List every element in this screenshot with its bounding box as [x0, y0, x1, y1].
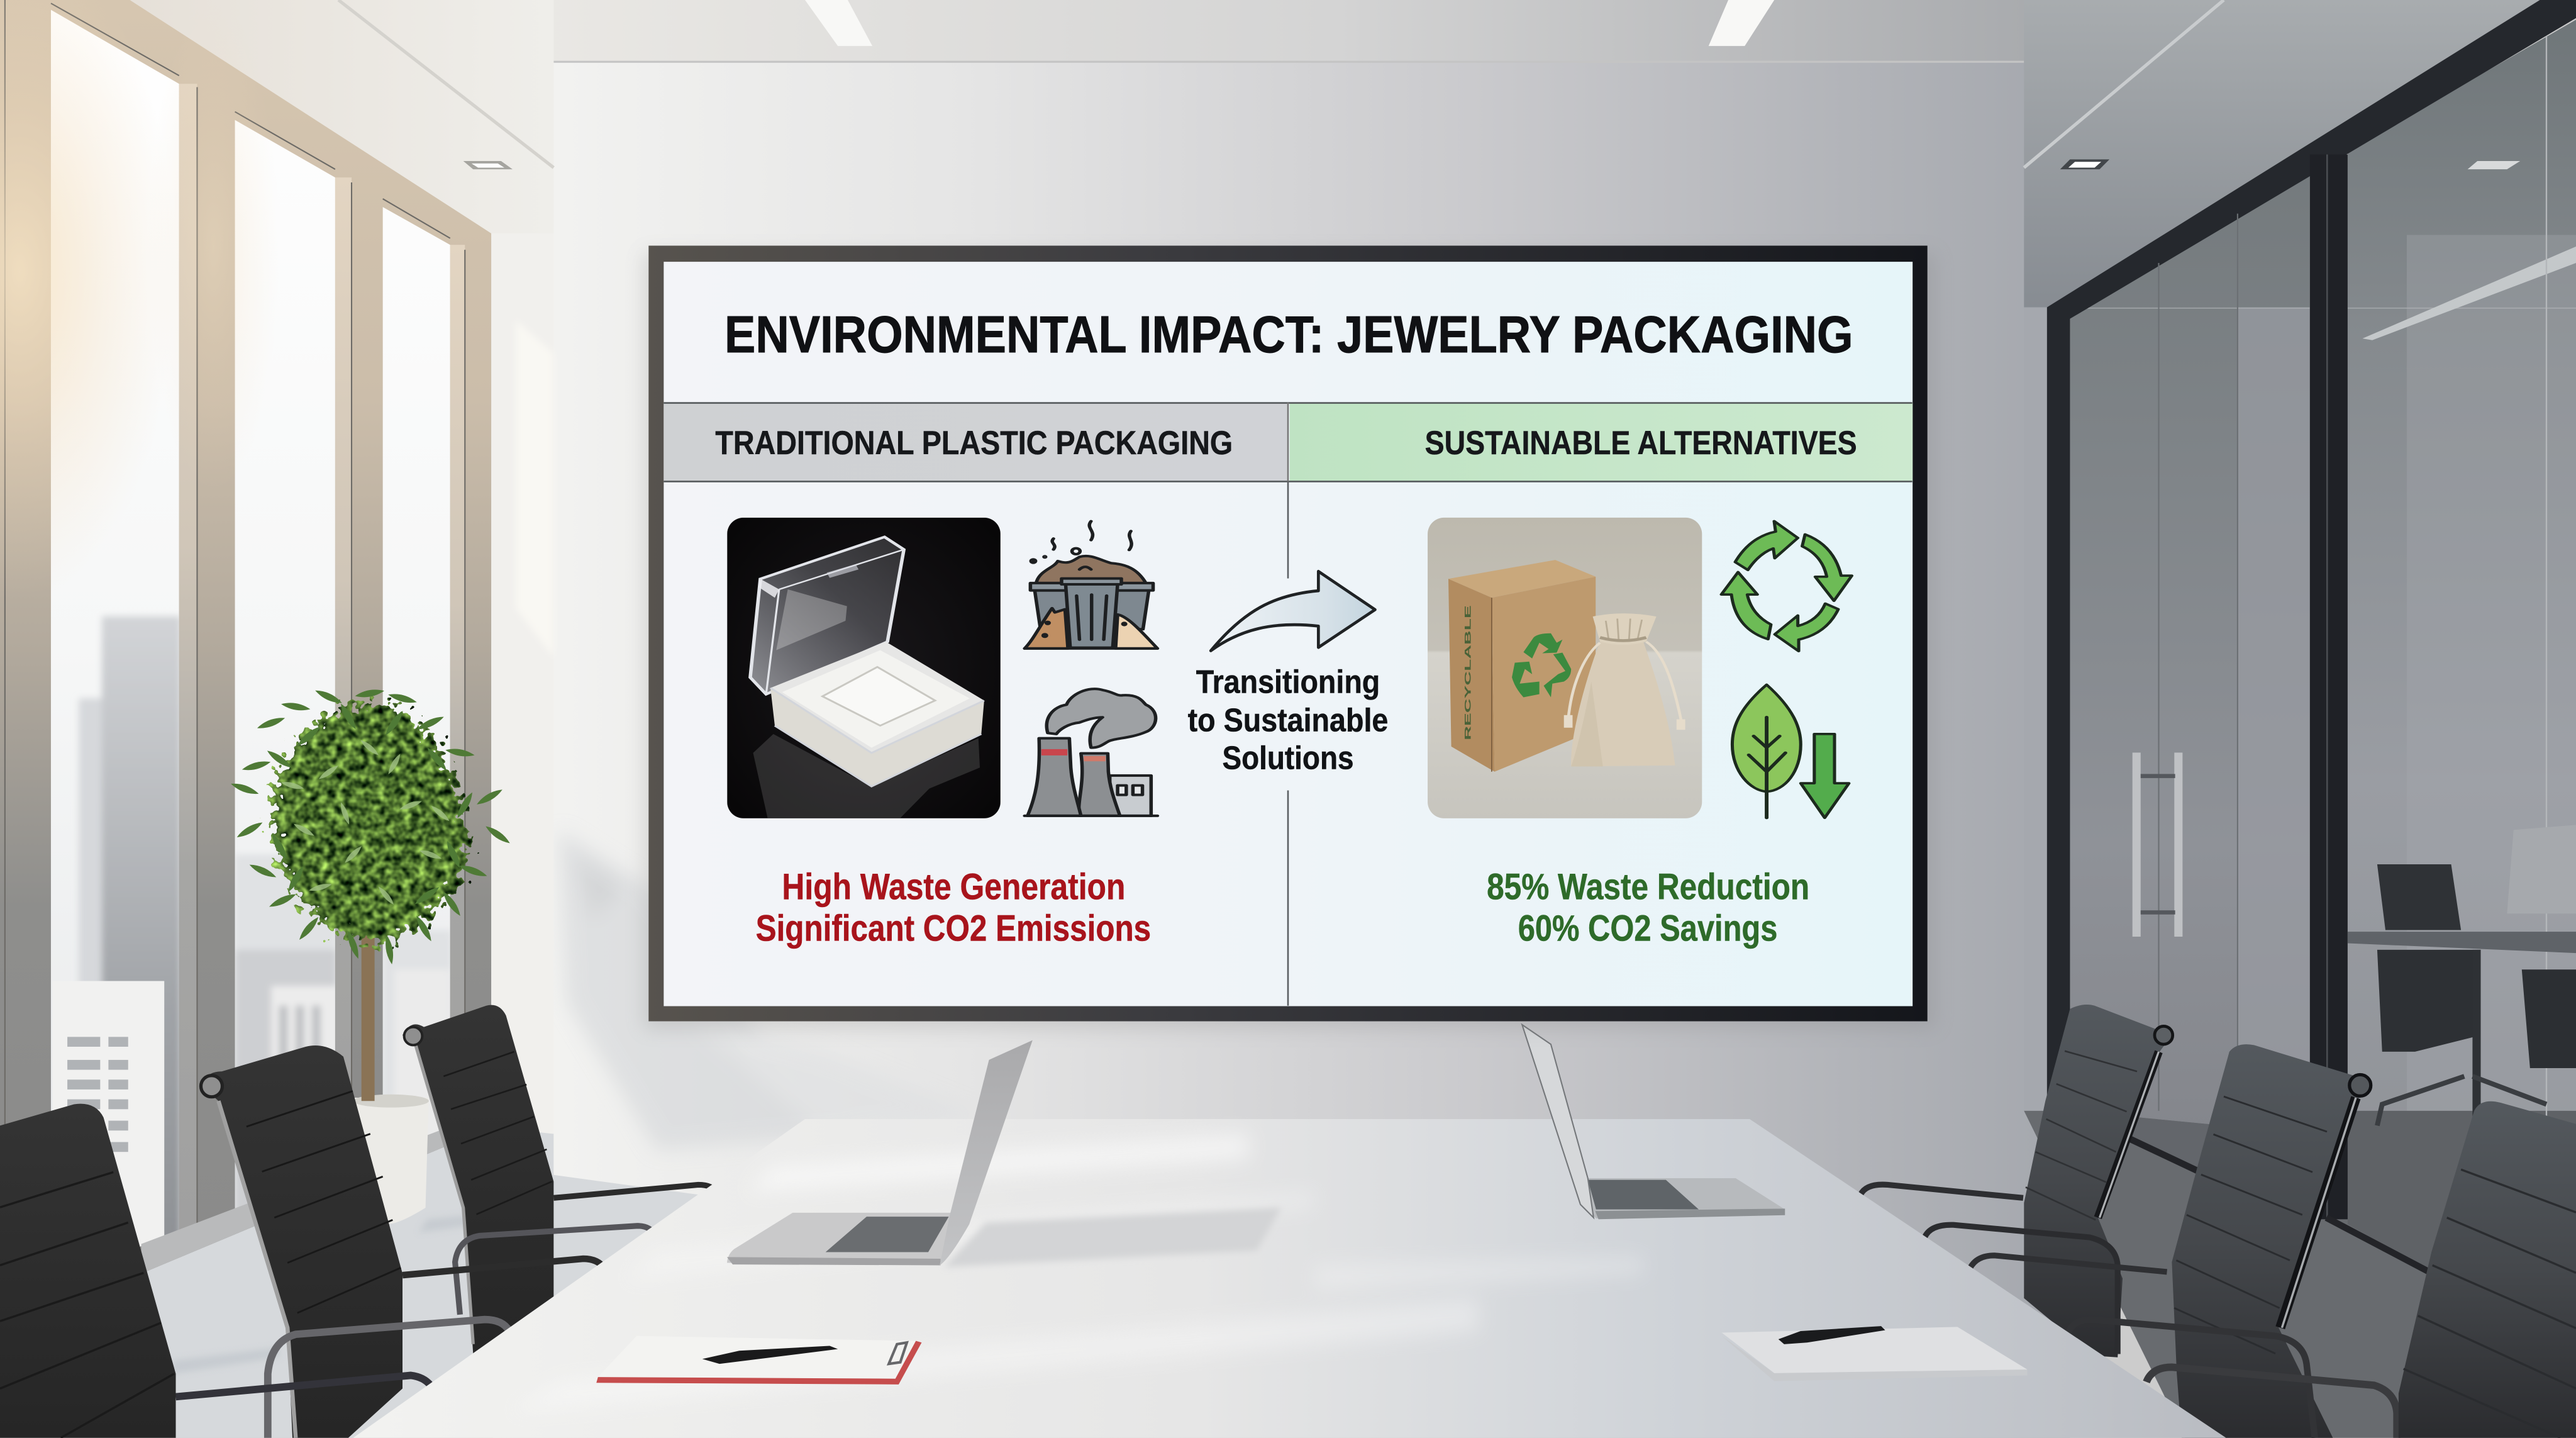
- ceiling recessed strip lights: [805, 0, 1774, 46]
- right laptop: [1522, 1025, 1785, 1219]
- windows: [51, 10, 450, 1275]
- potted plant: [230, 688, 512, 1224]
- sun glare: [0, 0, 176, 599]
- transition label: to Sustainable: [1188, 702, 1388, 739]
- box side label: RECYCLABLE: [1463, 605, 1473, 740]
- header band: sustainable alternatives: [1290, 403, 1913, 481]
- chair right rear: [1860, 1005, 2173, 1357]
- caption: traditional impacts: [756, 866, 1151, 949]
- laptop shadow: [945, 1208, 1282, 1267]
- slide background: [663, 262, 1913, 1006]
- caption: sustainable benefits: 60% CO2 Savings: [1518, 908, 1777, 949]
- plant foliage: [272, 703, 469, 943]
- photo: clear plastic jewelry box: [727, 518, 1001, 818]
- chair foreground right: [2399, 1101, 2576, 1438]
- chair far left side: [402, 1005, 716, 1354]
- header band: traditional plastic packaging: TRADITIONAL PLASTIC PACKAGING: [715, 425, 1233, 462]
- floor right: [2024, 1111, 2576, 1438]
- conference table: [353, 1025, 2226, 1438]
- right ceiling downlight: [2060, 159, 2109, 169]
- display bezel: [648, 246, 1928, 1022]
- right ceiling: [2024, 0, 2576, 307]
- clipboard with pen: [596, 1336, 921, 1385]
- wall display: [644, 246, 1935, 1028]
- cotton pouch: [1571, 642, 1675, 766]
- title: ENVIRONMENTAL IMPACT: JEWELRY PACKAGING: [724, 306, 1853, 364]
- left ceiling downlight: [464, 161, 513, 169]
- icon: overflowing trash bins: [1024, 521, 1157, 649]
- box lid: [750, 537, 904, 694]
- chair foreground left: [0, 1104, 176, 1438]
- display shadow: [644, 253, 1935, 1028]
- icon: factory smoke: [1024, 689, 1157, 816]
- header band: traditional plastic packaging: [663, 403, 1288, 481]
- notepad with pen: [1722, 1326, 2028, 1381]
- icon: recycling arrows: [1721, 521, 1852, 651]
- window wall frame: [0, 0, 491, 1334]
- caption: traditional impacts: High Waste Generation: [782, 866, 1125, 907]
- back wall: [493, 0, 2070, 1438]
- plant trunk: [362, 928, 375, 1101]
- left chairs: [0, 1005, 716, 1438]
- city skyline: [53, 616, 452, 1277]
- chair middle left: [176, 1045, 604, 1438]
- transition label: [1188, 664, 1388, 777]
- left ceiling: [130, 0, 553, 235]
- left laptop: [727, 1040, 1033, 1265]
- mullion side faces: [179, 84, 465, 1234]
- box base: [770, 688, 984, 786]
- transition label: Transitioning: [1196, 664, 1380, 701]
- door handles: [2133, 752, 2182, 937]
- icon: leaf with down arrow: [1732, 684, 1849, 818]
- caption: sustainable benefits: 85% Waste Reduction: [1487, 866, 1809, 907]
- caption: sustainable benefits: [1487, 866, 1809, 949]
- recycling logo: [1512, 633, 1571, 697]
- chair right middle: [2068, 1044, 2397, 1438]
- header band: sustainable alternatives: SUSTAINABLE ALTERNATIVES: [1425, 425, 1857, 462]
- side wall right: [2024, 307, 2047, 1113]
- photo: kraft box and cotton pouch: [1428, 518, 1702, 818]
- transition label: Solutions: [1223, 740, 1353, 777]
- left white column: [491, 233, 553, 1154]
- caption: traditional impacts: Significant CO2 Emissions: [756, 908, 1151, 949]
- reflected downlight: [2468, 161, 2520, 169]
- glass partition: [2070, 171, 2310, 1134]
- right chairs: [1860, 1005, 2576, 1438]
- black partition frame: [2047, 0, 2576, 1111]
- kraft box: [1448, 579, 1494, 772]
- reflected office furniture: [2348, 825, 2576, 1130]
- window sill: [142, 1111, 491, 1274]
- ceiling centre: [493, 0, 2024, 62]
- floor left: [0, 1127, 854, 1438]
- wall tree shadow: [558, 830, 985, 1151]
- glass reflection strip: [2362, 247, 2576, 340]
- table light bands: [509, 1134, 1643, 1413]
- plant pot: [353, 1098, 429, 1224]
- box reflection: [753, 734, 980, 818]
- transition arrow: [1211, 571, 1375, 650]
